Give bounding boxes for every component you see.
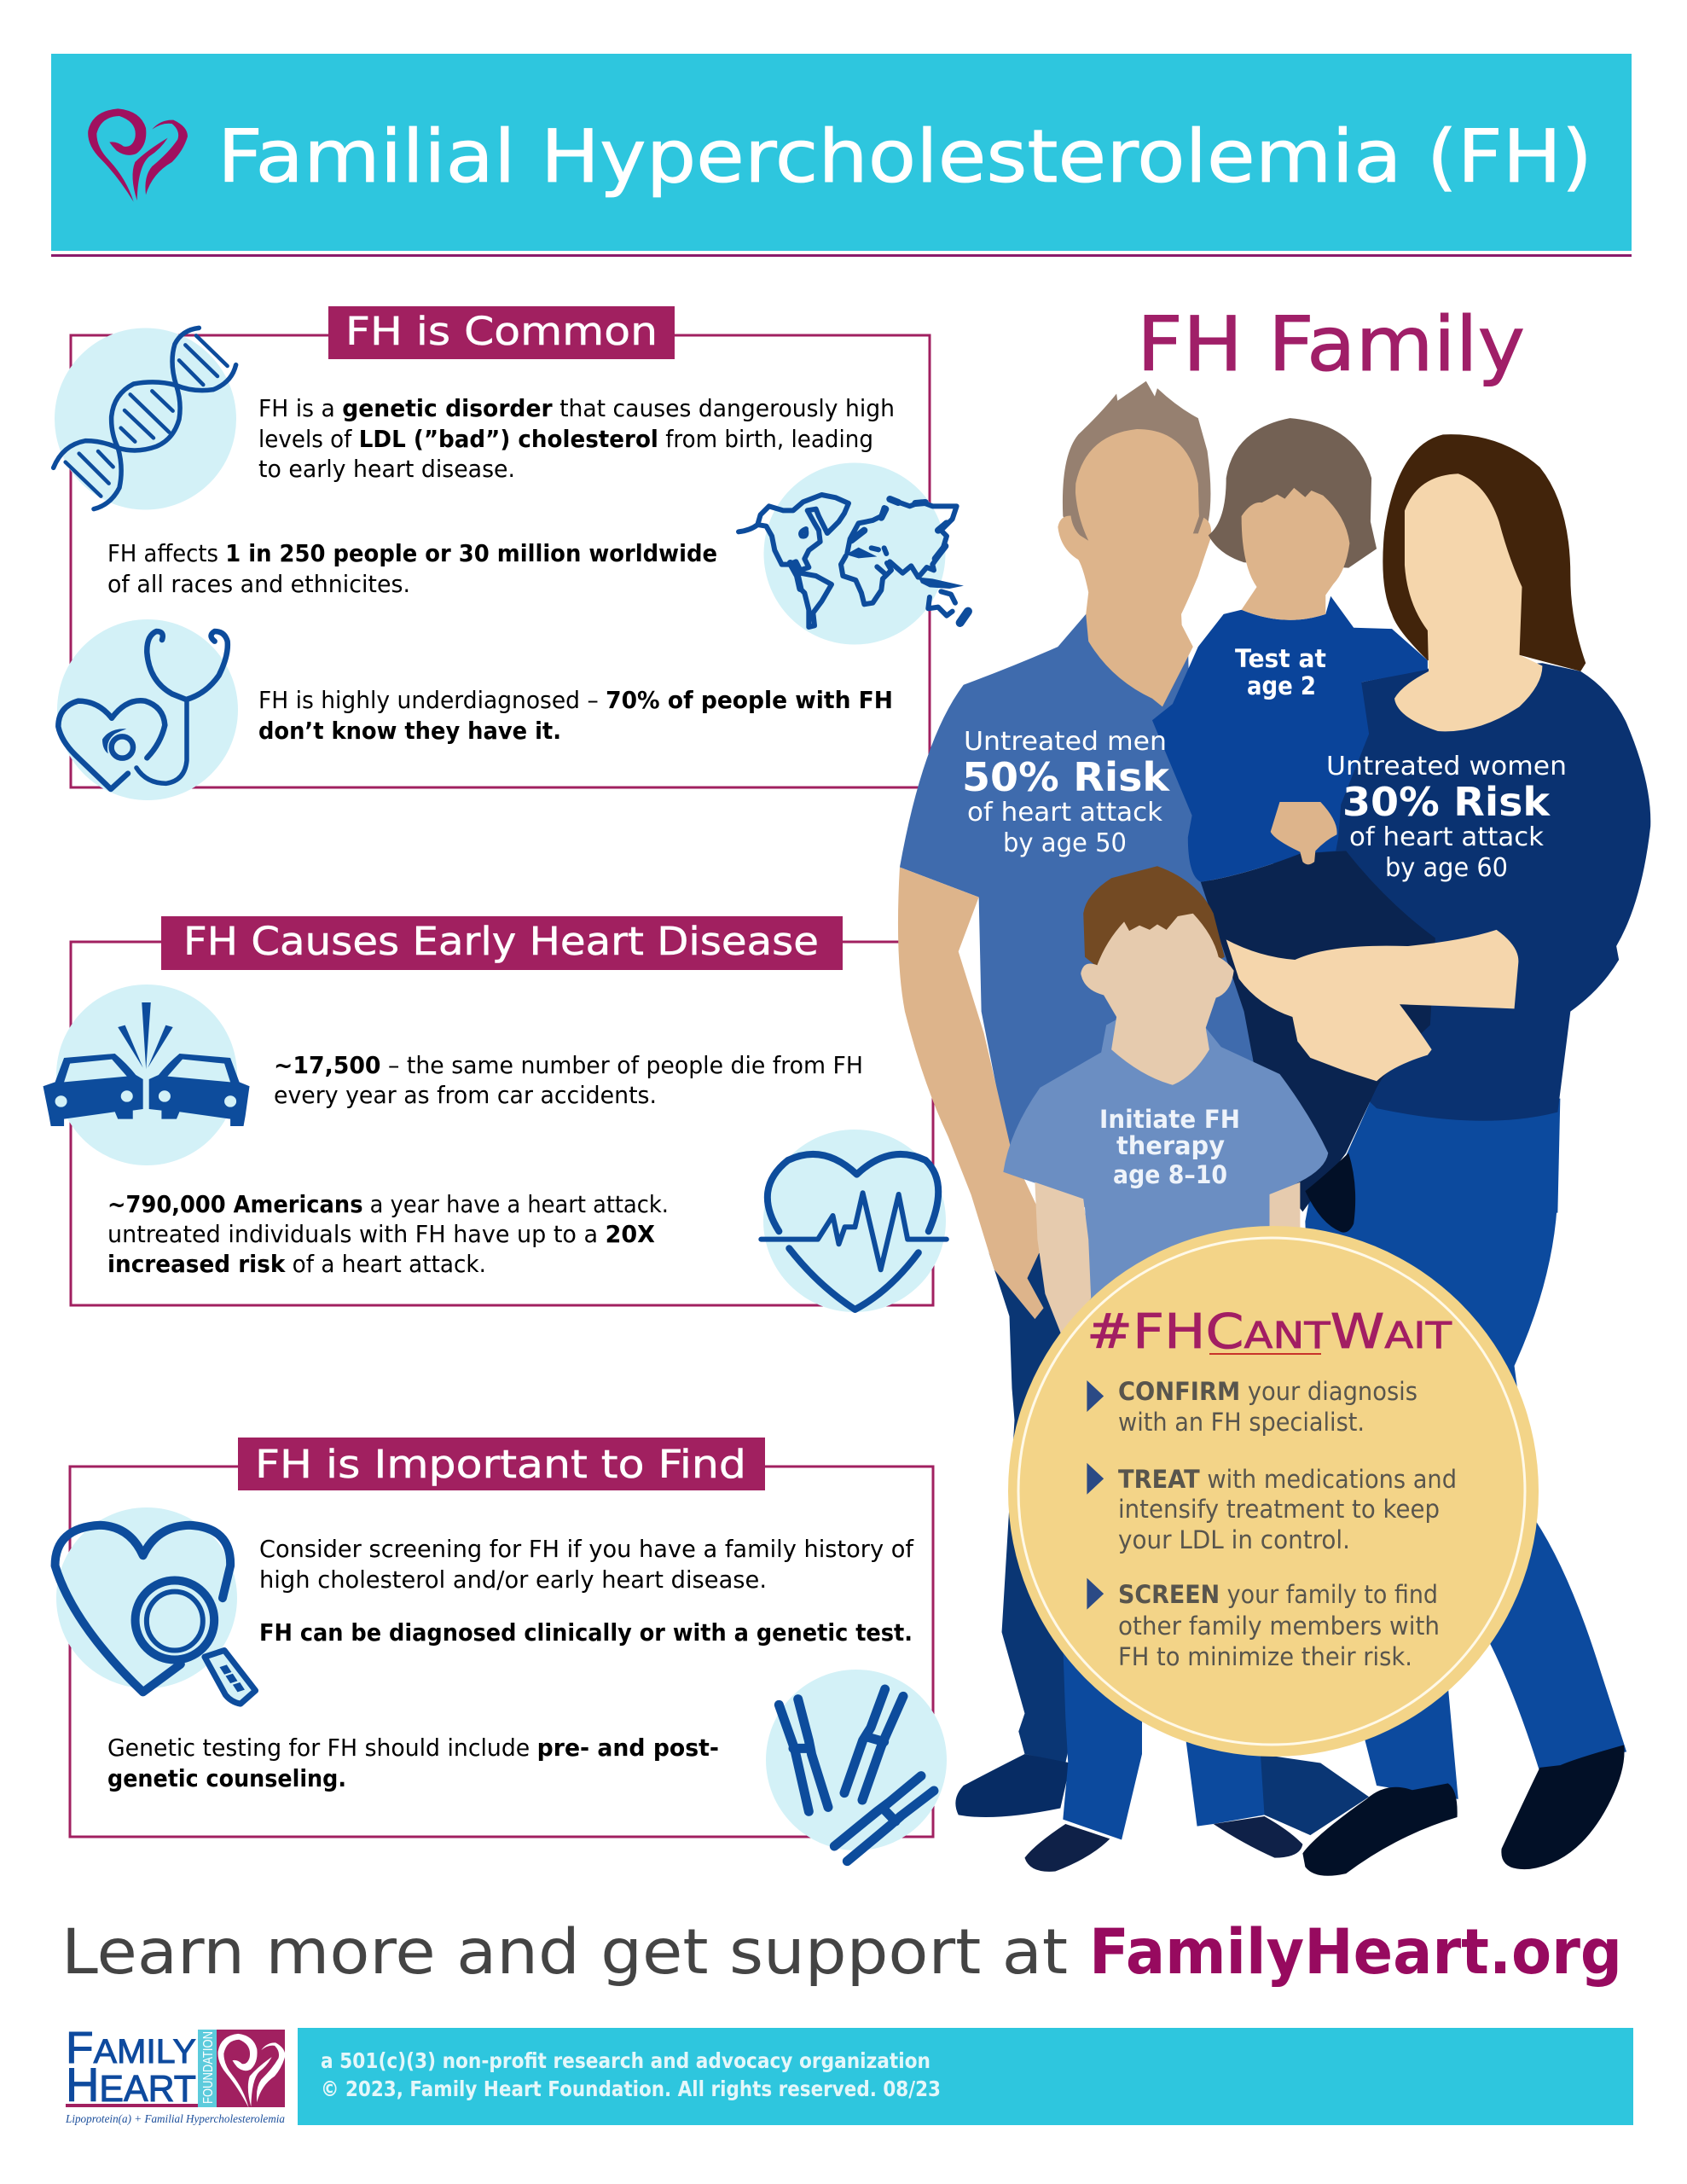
text: untreated men: of heart attack	[967, 798, 1163, 828]
heading: FH is Common	[328, 306, 675, 359]
text: treat: intensify treatment to keep	[1118, 1495, 1440, 1524]
figure: mother's arm	[1226, 930, 1518, 1081]
text: screen: other family members with	[1118, 1612, 1440, 1641]
footer bar: © 2023, Family Heart Foundation. All rights reserved. 08/23	[321, 2077, 941, 2101]
text: 17,500 deaths: every year as from car accidents.	[274, 1082, 657, 1109]
icon: car crash	[43, 985, 250, 1165]
text: untreated women: by age 60	[1385, 853, 1508, 883]
text: untreated women	[1326, 752, 1567, 883]
text: treat: your LDL in control.	[1118, 1525, 1350, 1554]
text: untreated men: Untreated men	[964, 727, 1167, 757]
panel: FH Causes Early Heart Disease	[43, 916, 947, 1312]
text: screening: high cholesterol and/or early heart disease.	[259, 1566, 767, 1594]
icon: world map	[739, 462, 968, 645]
text: confirm	[1118, 1377, 1417, 1437]
icon: heart logo	[88, 108, 188, 202]
text: confirm: CONFIRM your diagnosis	[1118, 1377, 1417, 1406]
header banner	[51, 54, 1632, 257]
icon: bullet arrows	[1087, 1380, 1104, 1610]
text: underdiagnosed: don’t know they have it.	[258, 717, 561, 745]
icon: heart with ECG	[761, 1130, 947, 1312]
text: treat	[1118, 1465, 1457, 1554]
text: treat: TREAT with medications and	[1118, 1465, 1457, 1494]
illustration: family	[898, 381, 1650, 1876]
call to action: FamilyHeart.org	[1089, 1916, 1622, 1989]
text: screening	[259, 1536, 914, 1647]
footer bar: a 501(c)(3) non-profit research and advocacy organization	[321, 2048, 930, 2073]
logo: Family Heart Foundation: HEART	[66, 2058, 196, 2111]
text: 1 in 250: of all races and ethnicites.	[107, 571, 410, 598]
text: test at age 2: Test at	[1235, 644, 1326, 673]
text: 1 in 250: FH affects 1 in 250 people or 30 million worldwide	[107, 540, 717, 567]
heading: FH Family: FH Family	[1137, 300, 1525, 388]
text: screen	[1118, 1580, 1440, 1671]
heading: FH Causes Early Heart Disease: FH Causes Early Heart Disease	[183, 919, 819, 964]
text: untreated men: 50% Risk	[962, 754, 1170, 800]
text: genetic disorder: to early heart disease.	[258, 456, 515, 483]
text: 790,000 Americans: increased risk of a heart attack.	[107, 1251, 486, 1278]
text: initiate FH therapy: Initiate FH	[1099, 1105, 1240, 1134]
text: underdiagnosed: FH is highly underdiagnosed – 70% of people with FH	[258, 687, 893, 714]
logo: Family Heart Foundation: FAMILY	[66, 2024, 196, 2073]
icon: DNA helix	[54, 328, 236, 510]
text: untreated women: Untreated women	[1326, 752, 1567, 781]
text: untreated women: of heart attack	[1349, 822, 1545, 852]
figure: lower legs and shoes	[955, 1194, 1626, 1876]
figure: boy	[1003, 866, 1328, 1339]
figure: father	[898, 381, 1279, 1319]
text: untreated men: by age 50	[1003, 828, 1127, 858]
text: screen: FH to minimize their risk.	[1118, 1642, 1412, 1671]
text: test at age 2	[1235, 644, 1326, 700]
text: screening: FH can be diagnosed clinically or with a genetic test.	[259, 1619, 913, 1647]
logo: Family Heart Foundation	[65, 2024, 285, 2126]
text: genetic disorder	[258, 395, 895, 483]
text: 17,500 deaths: ~17,500 – the same number of people die from FH	[274, 1052, 863, 1079]
text: 17,500 deaths	[274, 1052, 863, 1109]
heading: FH is Important to Find: FH is Important to Find	[255, 1442, 746, 1487]
figure: toddler	[1152, 418, 1435, 1233]
text: 1 in 250	[107, 540, 717, 598]
icon: heart with magnifier	[55, 1507, 256, 1704]
footer bar	[298, 2028, 1633, 2125]
text: initiate FH therapy: therapy	[1116, 1131, 1225, 1160]
panel: FH Can't Wait circle	[1008, 1226, 1539, 1757]
text: screen: SCREEN your family to find	[1118, 1580, 1438, 1609]
text: genetic counseling: genetic counseling.	[107, 1765, 346, 1792]
text: genetic disorder: levels of LDL (”bad”) cholesterol from birth, leading	[258, 426, 873, 453]
text: underdiagnosed	[258, 687, 893, 745]
title: Familial Hypercholesterolemia (FH)	[217, 114, 1592, 200]
call to action	[61, 1916, 1622, 1989]
text: initiate FH therapy: age 8–10	[1113, 1160, 1227, 1189]
text: genetic counseling	[107, 1734, 719, 1792]
text: initiate FH therapy	[1099, 1105, 1240, 1189]
icon: chromosomes	[766, 1670, 947, 1862]
text: genetic counseling: Genetic testing for FH should include pre- and post-	[107, 1734, 719, 1762]
text: 790,000 Americans	[107, 1191, 669, 1278]
text: test at age 2: age 2	[1247, 671, 1316, 700]
panel: FH is Important to Find	[55, 1438, 947, 1862]
call to action: Learn more and get support at	[61, 1916, 1068, 1989]
text: 790,000 Americans: ~790,000 Americans a year have a heart attack.	[107, 1191, 669, 1218]
heading: FH is Common: FH is Common	[345, 309, 658, 354]
icon: stethoscope heart	[57, 619, 238, 800]
text: untreated women: 30% Risk	[1342, 779, 1551, 825]
panel: FH is Common	[54, 306, 968, 800]
text: screening: Consider screening for FH if you have a family history of	[259, 1536, 914, 1563]
text: genetic disorder: FH is a genetic disorder that causes dangerously high	[258, 395, 895, 422]
figure: mother	[1244, 434, 1650, 1213]
heading: #FHCantWait: #FHC ANTWAIT	[1087, 1304, 1452, 1360]
text: 790,000 Americans: untreated individuals with FH have up to a 20X	[107, 1221, 655, 1248]
text: untreated men	[962, 727, 1170, 858]
logo: Family Heart Foundation: Lipoprotein(a) + Familial Hypercholesterolemia	[65, 2113, 285, 2126]
logo: Family Heart Foundation: FOUNDATION	[201, 2031, 216, 2104]
text: confirm: with an FH specialist.	[1118, 1408, 1365, 1437]
